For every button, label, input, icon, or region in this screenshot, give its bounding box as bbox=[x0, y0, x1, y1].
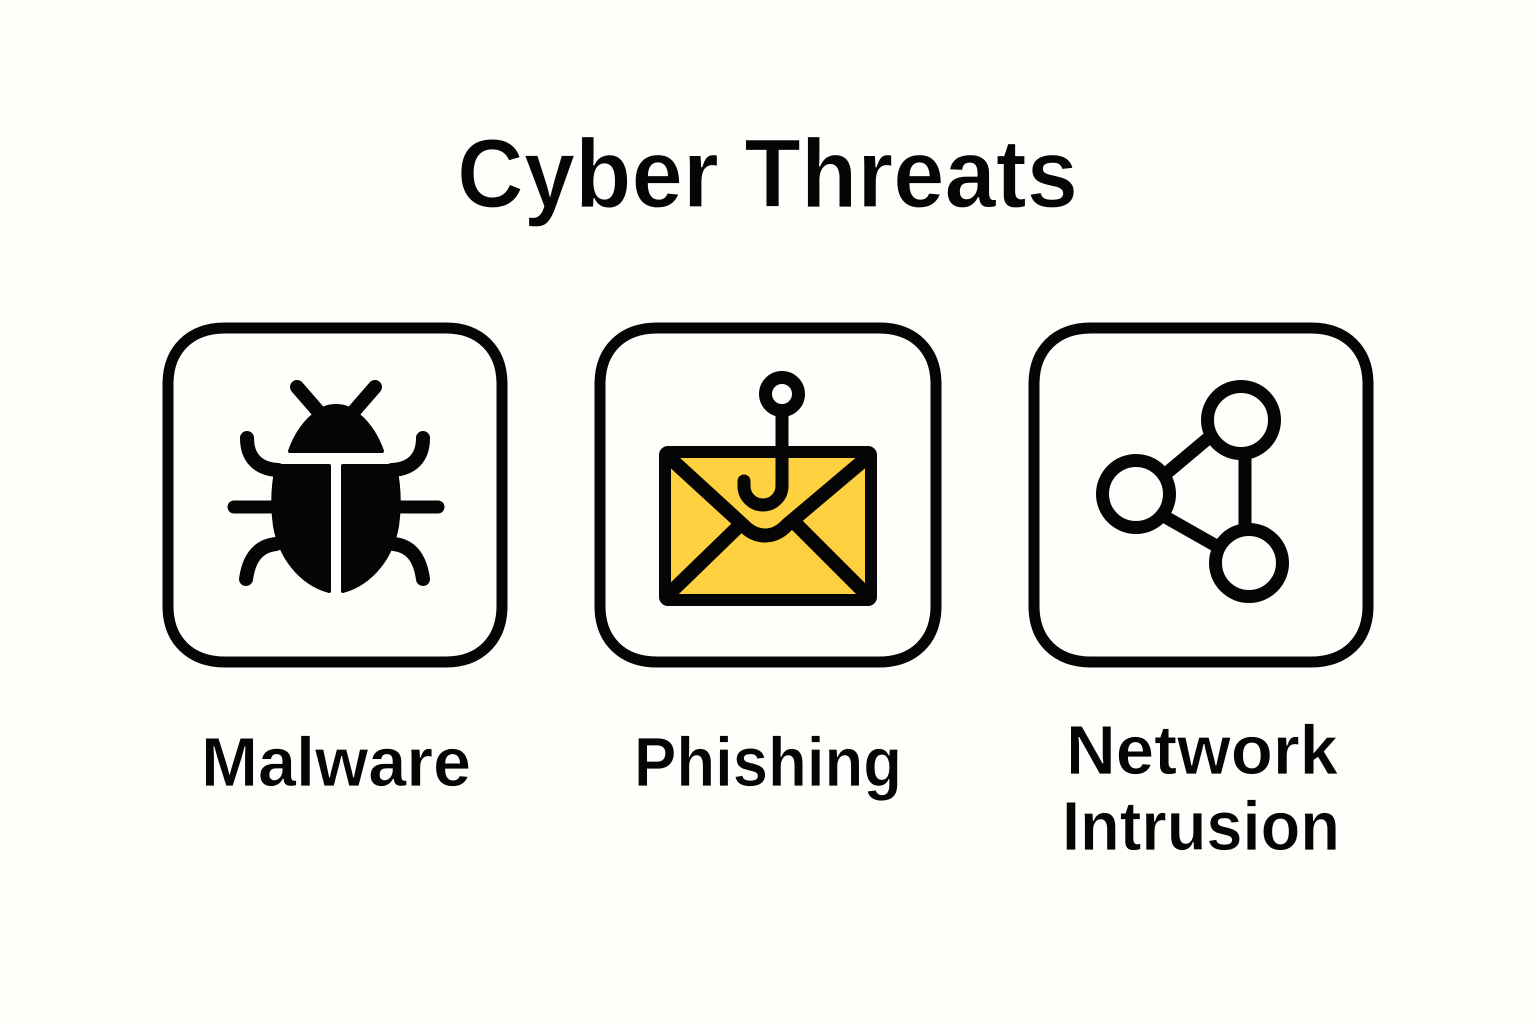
panel: phishing bbox=[600, 328, 936, 662]
panel frame: phishing bbox=[600, 328, 936, 662]
label: malware: Malware bbox=[201, 723, 471, 801]
panel: network intrusion bbox=[1034, 328, 1368, 662]
panel frame: network intrusion bbox=[1034, 328, 1368, 662]
label line: network: Network bbox=[1066, 711, 1338, 789]
icon: network nodes bbox=[1102, 386, 1282, 596]
panel frame: malware bbox=[168, 328, 502, 662]
label: phishing: Phishing bbox=[634, 723, 902, 801]
label: network intrusion bbox=[1062, 711, 1340, 865]
icon: envelope with hook bbox=[665, 378, 871, 600]
icon: bug bbox=[234, 387, 438, 591]
title: Cyber Threats bbox=[457, 119, 1078, 228]
label line: intrusion: Intrusion bbox=[1062, 787, 1340, 865]
panel: malware bbox=[168, 328, 502, 662]
